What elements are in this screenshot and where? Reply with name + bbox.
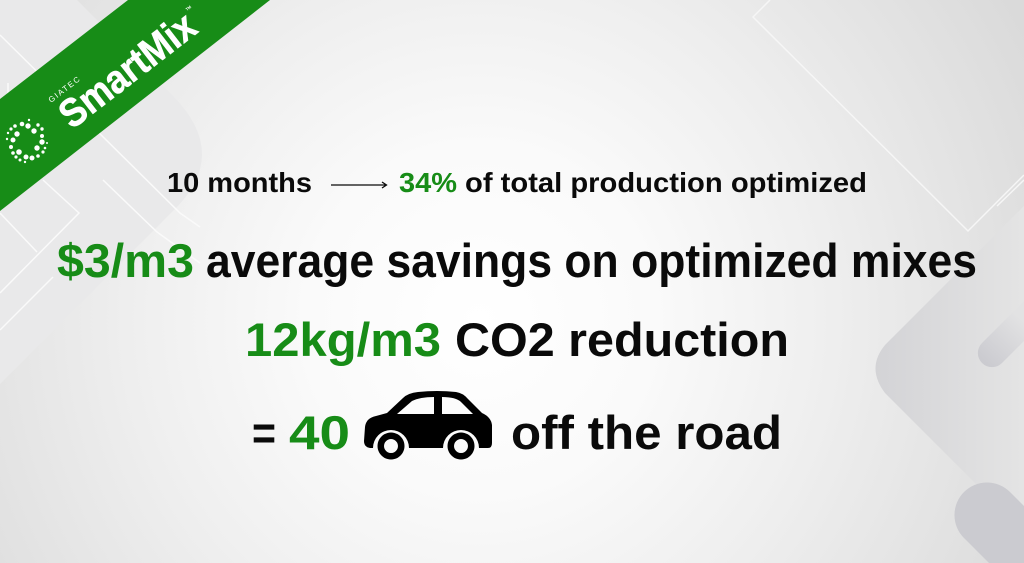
green corner banner	[0, 0, 270, 211]
logo: TM: TM	[185, 4, 193, 12]
line 4: cars off the road: 40	[289, 406, 350, 459]
line 1: months to production: 34%	[399, 167, 457, 198]
right large background shape	[876, 206, 1024, 532]
line 3: CO2 reduction: CO2 reduction	[455, 313, 789, 366]
line 3: CO2 reduction: 12kg/m3	[245, 313, 441, 366]
line 2: savings: $3/m3	[57, 234, 194, 287]
icon: car	[364, 391, 492, 460]
line 1: months to production: 10 months	[167, 167, 312, 198]
line 1: months to production: of total production optimized	[465, 167, 867, 198]
top right outline diamond	[753, 0, 1024, 231]
arrow	[331, 182, 386, 188]
logo: dotted ring	[6, 119, 48, 163]
left background shape	[0, 0, 202, 384]
line 4: cars off the road: off the road	[511, 406, 782, 459]
line 4: cars off the road	[252, 391, 782, 460]
right small pill	[978, 301, 1024, 367]
left outline lines	[0, 35, 200, 330]
right bottom pill	[954, 482, 1024, 563]
logo: GIATEC: GIATEC	[47, 75, 82, 105]
line 4: cars off the road: =	[252, 406, 276, 459]
line 1: months to production	[167, 167, 867, 198]
line 3: CO2 reduction	[245, 313, 789, 366]
line 2: savings: average savings on optimized mixes	[206, 234, 977, 287]
